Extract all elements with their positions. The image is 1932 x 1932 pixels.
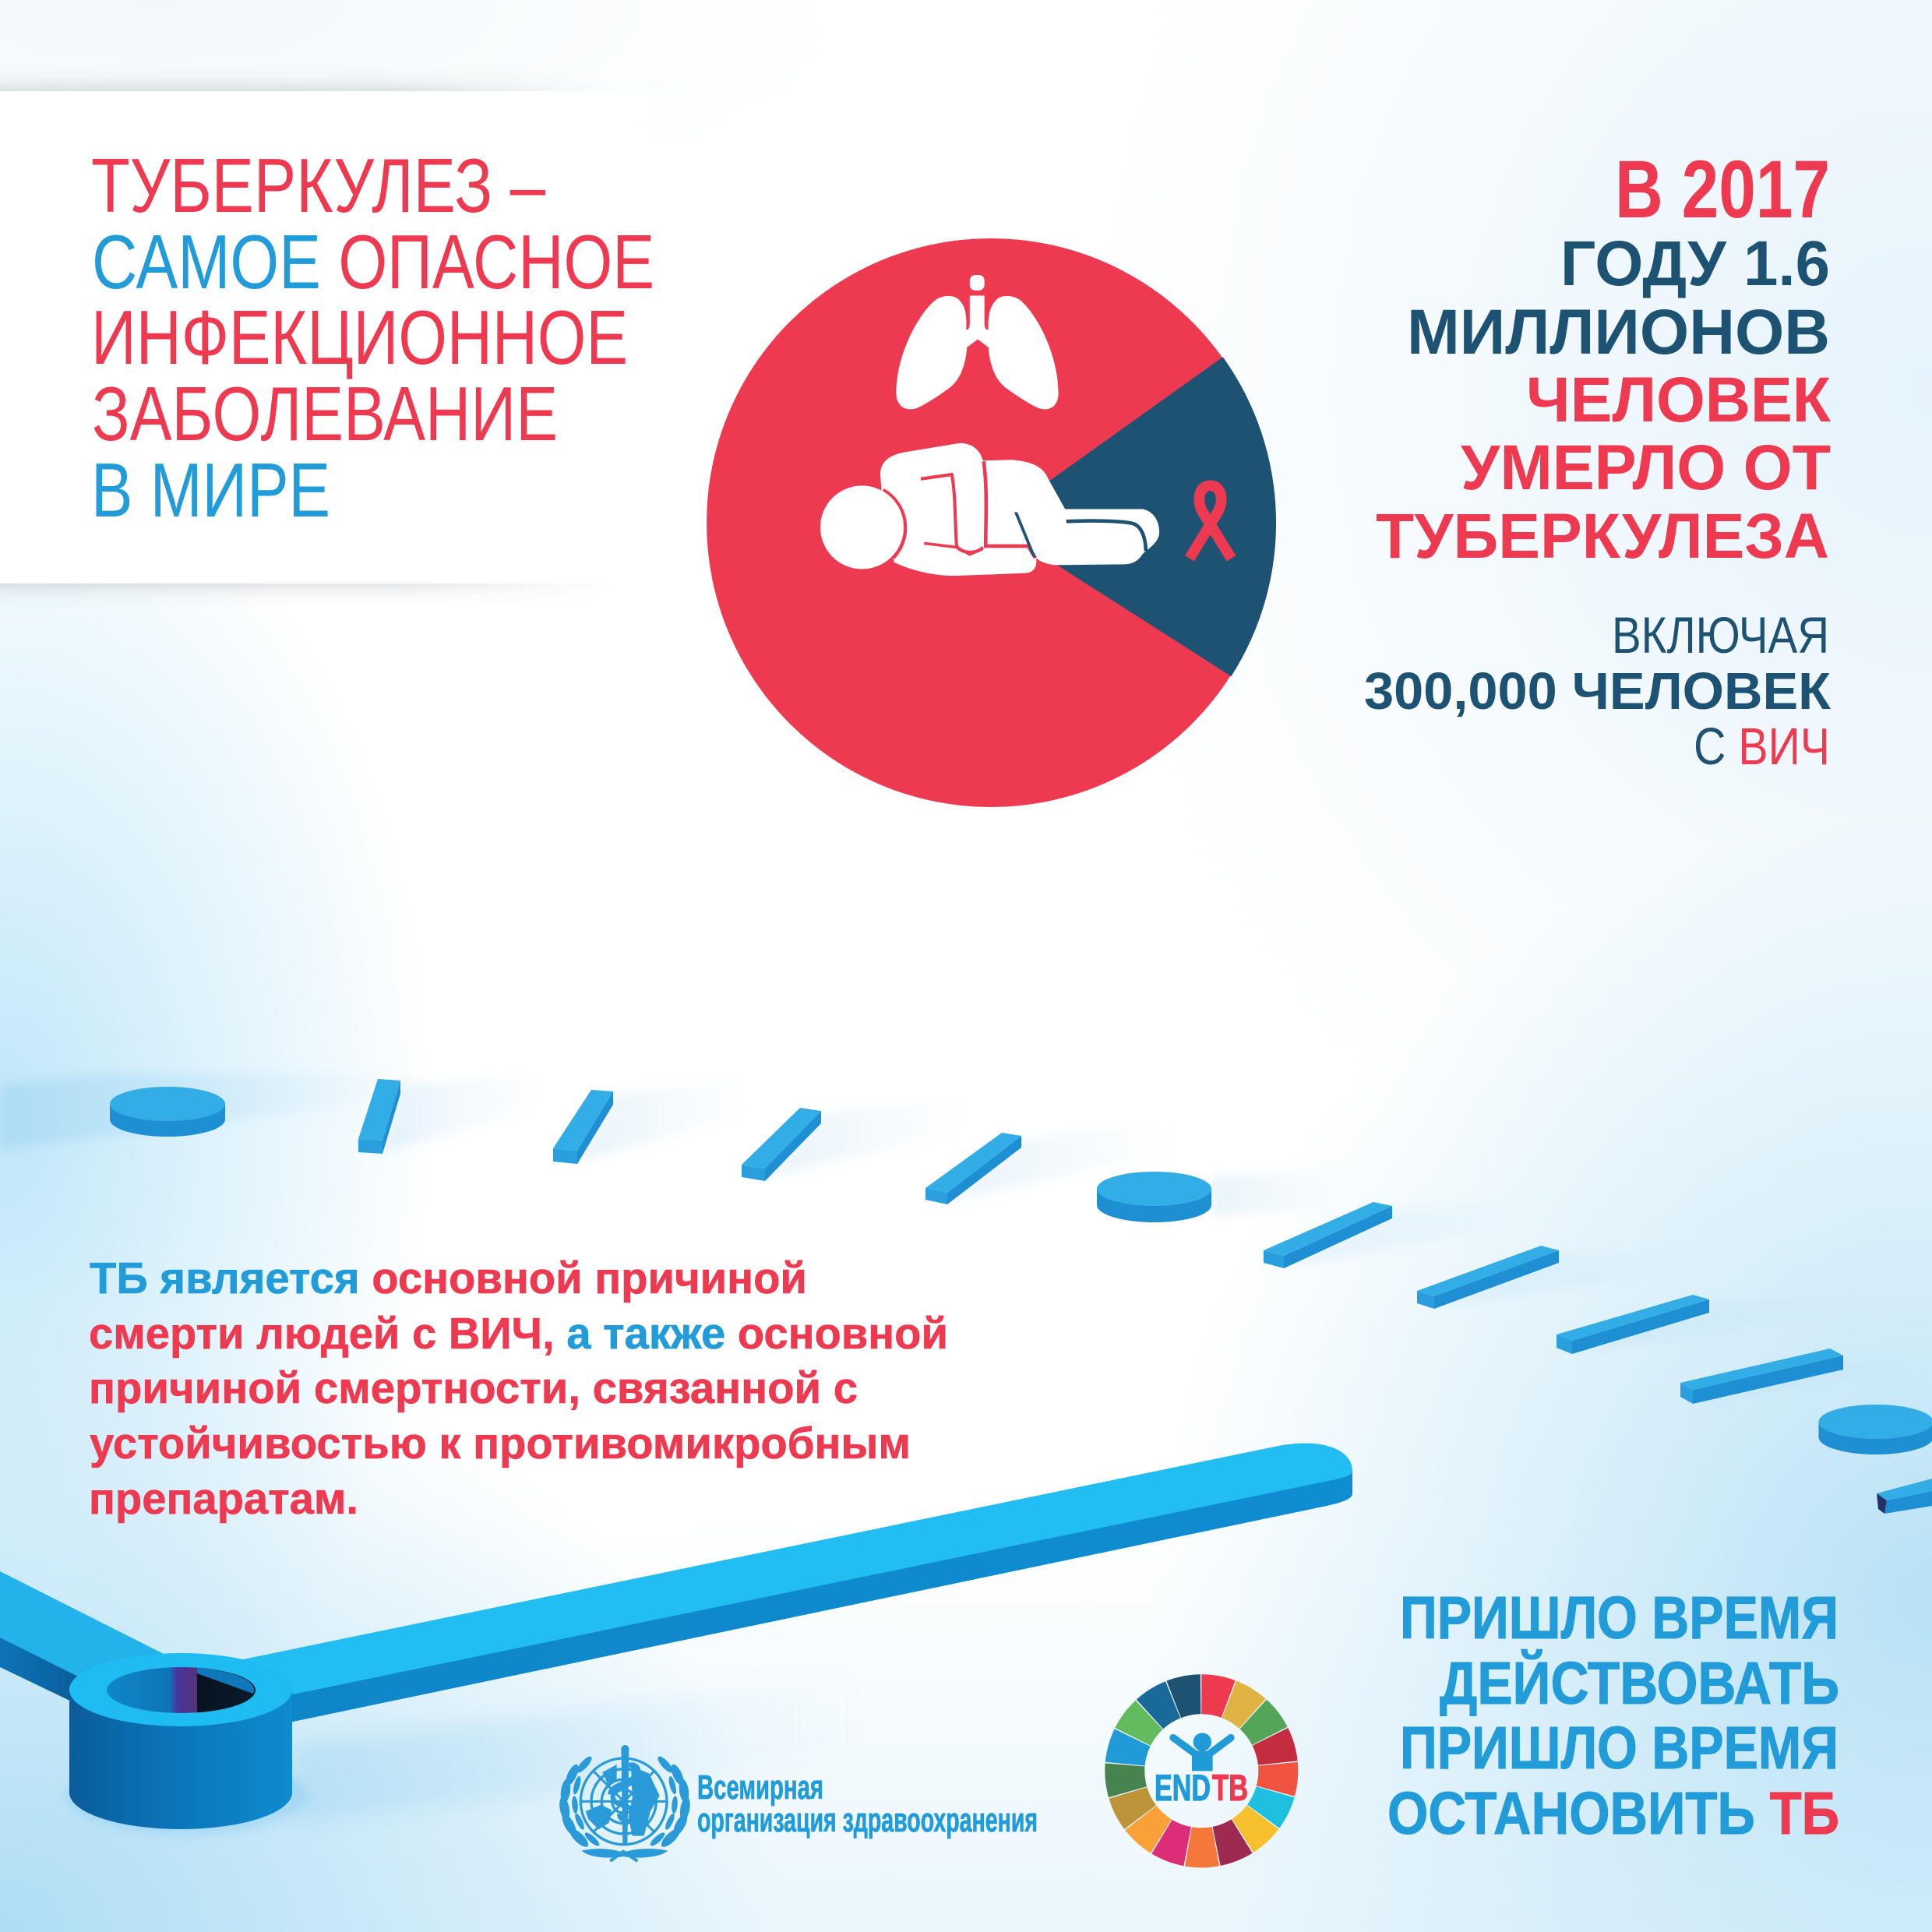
timeline: dash 8 <box>1680 1349 1843 1404</box>
timeline: dash 1 <box>358 1079 400 1154</box>
call to action: ПРИШЛО ВРЕМЯ <box>1400 1585 1839 1652</box>
statistic text: 2017 deaths: ТУБЕРКУЛЕЗА <box>1376 501 1829 572</box>
body text: устойчивостью к противомикробным <box>90 1419 911 1468</box>
timeline: dash 9 at right edge <box>1877 1479 1932 1514</box>
title: В МИРЕ <box>91 447 330 533</box>
icon: person lying down <box>820 443 1159 576</box>
timeline: dash 6 <box>1417 1246 1559 1309</box>
logo: WHO name <box>697 1768 1038 1839</box>
body text: ТБ является основной причиной <box>90 1253 807 1303</box>
timeline: disc 2 <box>1097 1172 1211 1222</box>
timeline: disc 1 <box>110 1087 225 1137</box>
call to action: ДЕЙСТВОВАТЬ <box>1440 1648 1839 1717</box>
call to action <box>1387 1585 1839 1847</box>
timeline: dash 5 <box>1264 1202 1392 1268</box>
title: САМОЕ ОПАСНОЕ <box>92 219 654 305</box>
statistic text: including people with HIV <box>1364 606 1831 776</box>
statistic text: including people with HIV: 300,000 ЧЕЛОВЕК <box>1364 662 1831 721</box>
statistic text: 2017 deaths <box>1376 144 1832 572</box>
logo: WHO emblem <box>558 1745 692 1861</box>
logo: End TB ring <box>1093 1662 1310 1879</box>
timeline: dash 4 <box>925 1133 1021 1204</box>
call to action: ПРИШЛО ВРЕМЯ <box>1400 1715 1839 1782</box>
pie chart: deaths with people with HIV share <box>707 238 1276 807</box>
logo: End TB wordmark: TB <box>1212 1767 1248 1808</box>
title: ИНФЕКЦИОННОЕ <box>91 294 628 380</box>
body text: причиной смертности, связанной с <box>89 1363 858 1413</box>
statistic text: including people with HIV: ВКЛЮЧАЯ <box>1612 606 1829 664</box>
panel: title card <box>0 90 701 583</box>
statistic text: 2017 deaths: В 2017 <box>1615 144 1830 235</box>
call to action: ОСТАНОВИТЬ ТБ <box>1387 1780 1839 1847</box>
statistic text: 2017 deaths: ГОДУ 1.6 <box>1560 228 1830 299</box>
clock hand: long bar <box>243 1444 1352 1726</box>
statistic text: 2017 deaths: МИЛЛИОНОВ <box>1407 297 1830 368</box>
logo: WHO name: организация здравоохранения <box>697 1801 1038 1839</box>
statistic text: including people with HIV: С ВИЧ <box>1694 717 1830 776</box>
timeline: dash 7 <box>1557 1295 1709 1354</box>
timeline: dash 2 <box>553 1090 613 1164</box>
shadows under floor pieces <box>0 1074 1932 1835</box>
title <box>91 143 654 533</box>
timeline: disc 3 <box>1818 1405 1932 1454</box>
logo: End TB wordmark: END <box>1155 1767 1211 1808</box>
icon: lungs <box>896 275 1059 409</box>
title: ТУБЕРКУЛЕЗ – <box>91 143 545 228</box>
body text: препаратам. <box>89 1474 358 1524</box>
icon: End TB figure <box>1173 1733 1231 1771</box>
statistic text: 2017 deaths: УМЕРЛО ОТ <box>1461 432 1831 503</box>
timeline: dash 3 <box>742 1108 821 1181</box>
title: ЗАБОЛЕВАНИЕ <box>92 371 558 457</box>
clock hand: central hub <box>69 1653 292 1829</box>
body text: смерти людей с ВИЧ, а также основной <box>89 1309 948 1359</box>
clock hand: left bar <box>0 1571 165 1705</box>
body text <box>89 1253 948 1524</box>
icon: red ribbon <box>1190 485 1232 559</box>
logo: WHO name: Всемирная <box>697 1768 823 1807</box>
statistic text: 2017 deaths: ЧЕЛОВЕК <box>1526 365 1832 435</box>
